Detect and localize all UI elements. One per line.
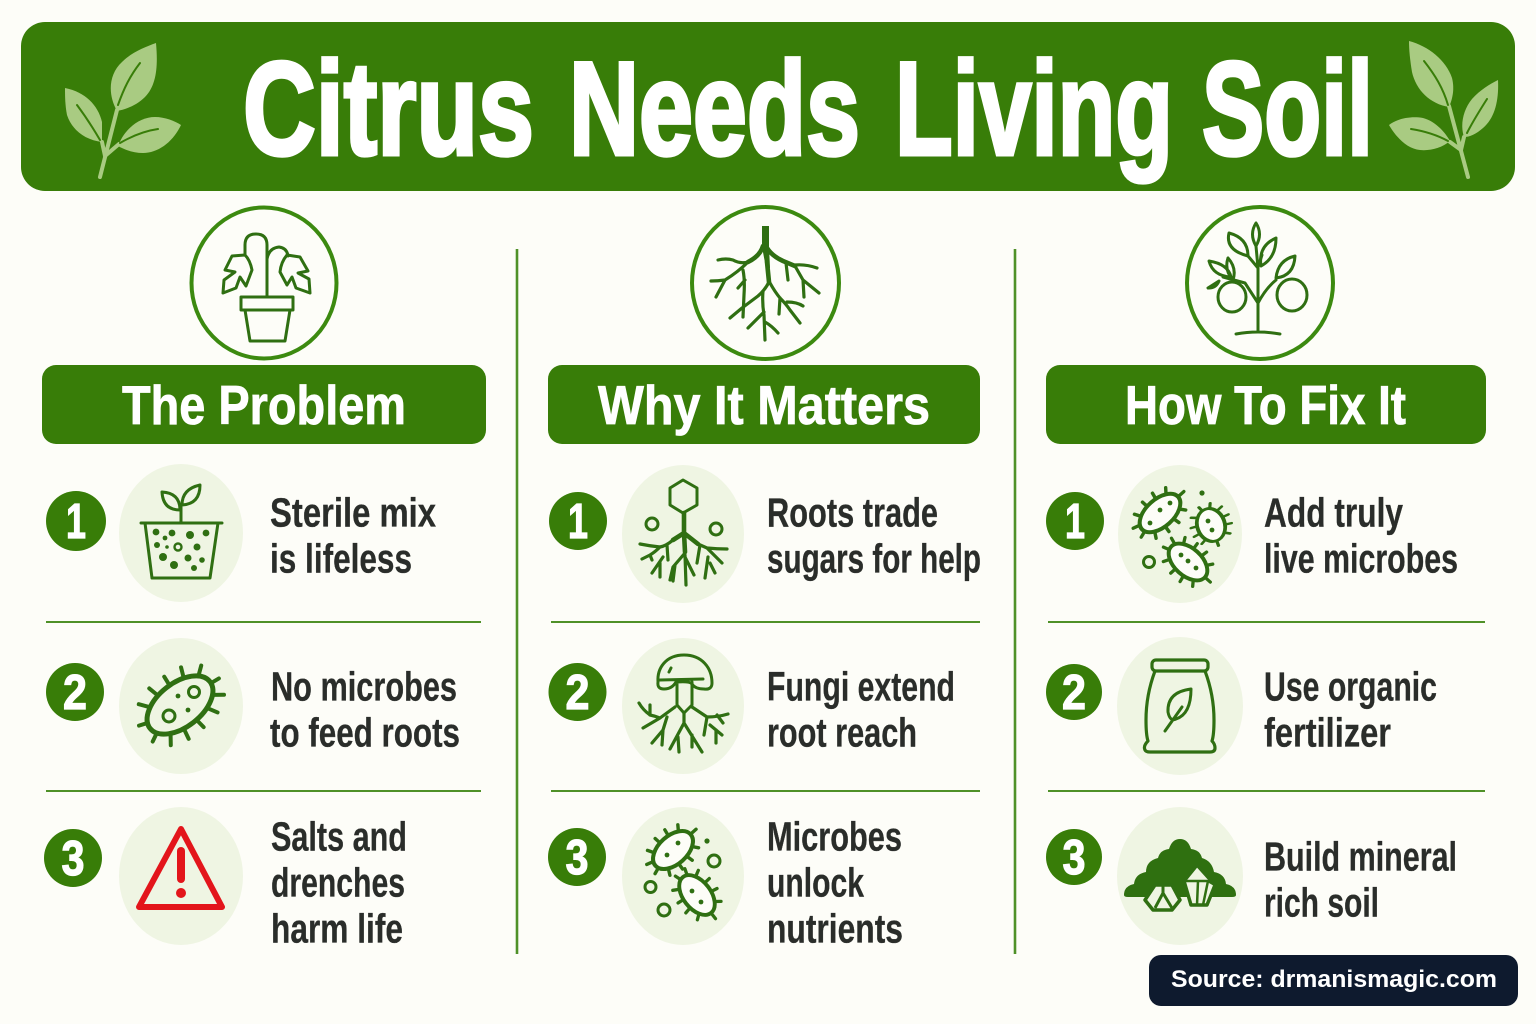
title: Citrus bbox=[243, 36, 534, 184]
item 1: live microbes: live microbes bbox=[1264, 536, 1458, 582]
item 3: salts and drenches: 3 bbox=[62, 832, 84, 886]
heading: How To Fix It: How To Fix It bbox=[1125, 374, 1406, 436]
heading: Why It Matters: Why It Matters bbox=[598, 374, 930, 436]
item 3: mineral rich soil: rich soil bbox=[1264, 880, 1379, 926]
item 3: microbes unlock nutrients: nutrients bbox=[767, 906, 903, 952]
item 1: live microbes: Add truly bbox=[1264, 490, 1403, 536]
item 2: fungi extend bbox=[548, 638, 955, 774]
source badge bbox=[1149, 955, 1518, 1006]
divider bbox=[551, 621, 980, 623]
item 1: live microbes bbox=[1046, 465, 1458, 603]
heading: How To Fix It bbox=[1046, 365, 1486, 444]
icon: citrus tree bbox=[1187, 207, 1333, 359]
icon: wilted plant bbox=[192, 208, 336, 358]
item 3: microbes unlock nutrients: unlock bbox=[767, 860, 864, 906]
column dividers bbox=[517, 249, 1015, 954]
item 2: fungi extend: 2 bbox=[566, 666, 590, 720]
item 2: organic fertilizer: Use organic bbox=[1264, 664, 1437, 710]
item 2: fungi extend: Fungi extend bbox=[767, 664, 955, 710]
item 1: sterile mix: 1 bbox=[66, 495, 86, 549]
divider bbox=[46, 621, 481, 623]
title bbox=[243, 36, 1373, 184]
item 3: salts and drenches bbox=[44, 807, 407, 952]
divider bbox=[551, 790, 980, 792]
icon: right leaf sprig bbox=[1389, 41, 1498, 177]
divider bbox=[1048, 621, 1485, 623]
item 3: mineral rich soil bbox=[1046, 807, 1457, 945]
item 3: mineral rich soil: Build mineral bbox=[1264, 834, 1457, 880]
icon: left leaf sprig bbox=[65, 43, 181, 177]
item 3: mineral rich soil: 3 bbox=[1062, 831, 1086, 885]
source badge: Source: drmanismagic.com bbox=[1171, 966, 1497, 993]
item 1: roots trade sugars bbox=[549, 465, 981, 603]
item 2: organic fertilizer: fertilizer bbox=[1264, 710, 1391, 756]
heading: The Problem: The Problem bbox=[122, 374, 406, 436]
item 2: organic fertilizer: 2 bbox=[1062, 666, 1086, 720]
panel: Why It Matters bbox=[548, 207, 981, 952]
item 2: no microbes: 2 bbox=[63, 666, 87, 720]
item 3: microbes unlock nutrients: Microbes bbox=[767, 814, 902, 860]
title: Needs bbox=[569, 36, 860, 184]
panel: How To Fix It bbox=[1046, 207, 1486, 945]
title banner bbox=[21, 22, 1515, 191]
item 2: organic fertilizer bbox=[1046, 637, 1437, 775]
item 1: sterile mix bbox=[46, 464, 436, 602]
item 3: salts and drenches: Salts and bbox=[271, 814, 407, 860]
title: Living bbox=[895, 36, 1173, 184]
icon: root system bbox=[692, 207, 839, 359]
item 2: fungi extend: root reach bbox=[767, 710, 917, 756]
item 1: roots trade sugars: 1 bbox=[568, 495, 588, 549]
divider bbox=[46, 790, 481, 792]
divider bbox=[1048, 790, 1485, 792]
title: Soil bbox=[1202, 36, 1373, 184]
item 1: live microbes: 1 bbox=[1065, 495, 1085, 549]
item 3: microbes unlock nutrients: 3 bbox=[566, 831, 588, 885]
item 1: sterile mix: is lifeless bbox=[270, 536, 412, 582]
item 3: salts and drenches: drenches bbox=[271, 860, 405, 906]
item 2: no microbes: No microbes bbox=[271, 664, 457, 710]
item 2: no microbes: to feed roots bbox=[270, 710, 460, 756]
heading: Why It Matters bbox=[548, 365, 980, 444]
item 2: no microbes bbox=[46, 638, 460, 774]
item 1: sterile mix: Sterile mix bbox=[270, 490, 436, 536]
item 1: roots trade sugars: sugars for help bbox=[767, 536, 981, 582]
item 3: microbes unlock nutrients bbox=[548, 807, 903, 952]
heading: The Problem bbox=[42, 365, 486, 444]
panel: The Problem bbox=[42, 208, 486, 952]
item 1: roots trade sugars: Roots trade bbox=[767, 490, 938, 536]
item 3: salts and drenches: harm life bbox=[271, 906, 403, 952]
